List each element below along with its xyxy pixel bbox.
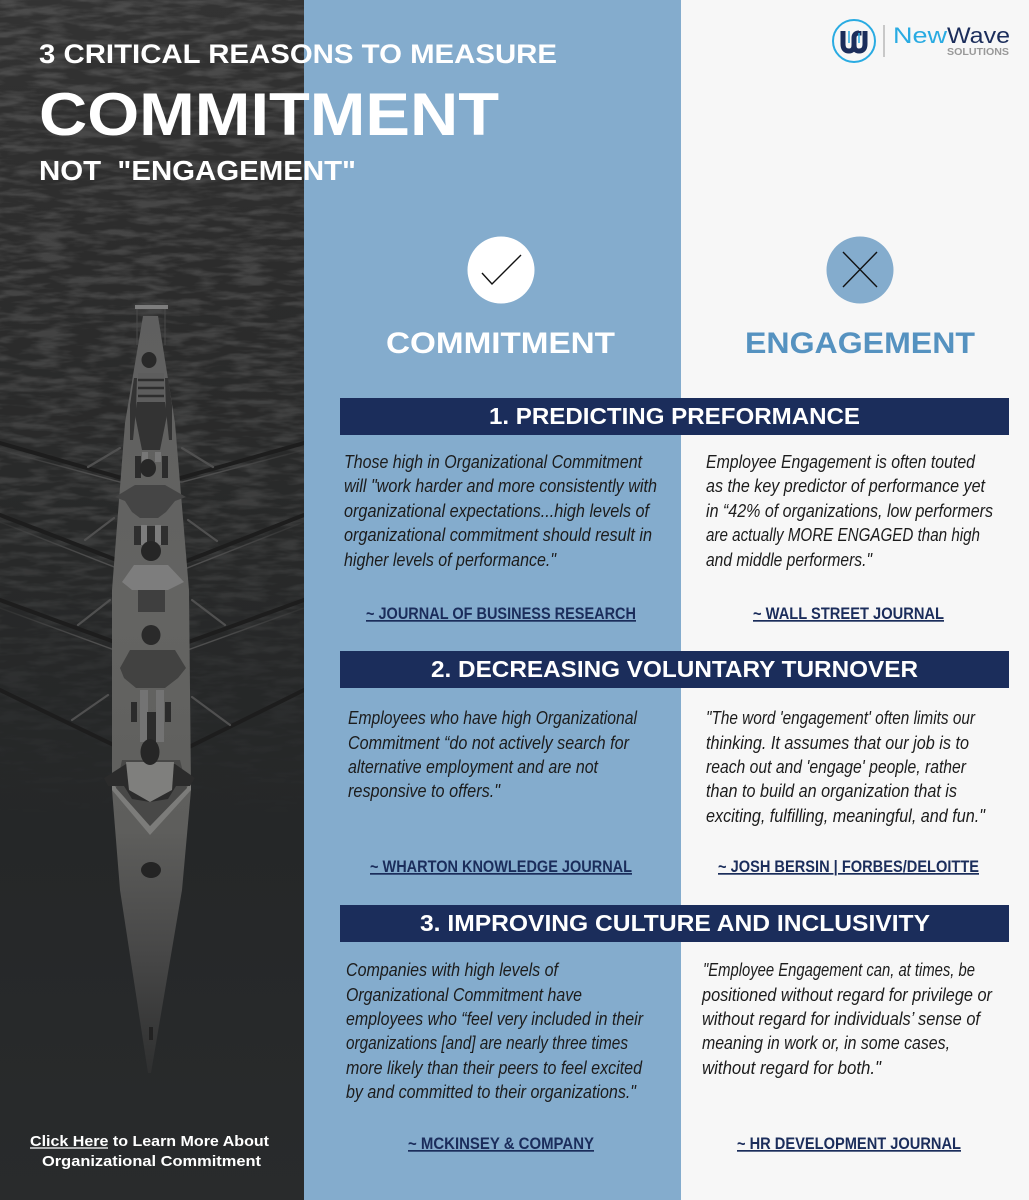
section 2 commitment quote: Commitment “do not actively search for: [348, 733, 630, 753]
section 3 banner: 3. IMPROVING CULTURE AND INCLUSIVITY: [420, 910, 930, 936]
section 3 engagement quote: [701, 960, 993, 1078]
boat hull: [112, 316, 191, 1073]
heading: engagement: ENGAGEMENT: [745, 327, 975, 360]
section 1 commitment quote: Those high in Organizational Commitment: [344, 452, 643, 472]
section 1 commitment quote: will "work harder and more consistently with: [344, 476, 657, 496]
rower 1: [130, 352, 172, 450]
section 1 engagement quote: are actually MORE ENGAGED than high: [706, 525, 980, 545]
section 1 engagement quote: [706, 452, 993, 570]
section 2 commitment quote: alternative employment and are not: [348, 757, 599, 777]
source: wharton knowledge journal: ~ WHARTON KNOWLEDGE JOURNAL: [370, 857, 632, 876]
section 3 engagement quote: meaning in work or, in some cases,: [702, 1033, 950, 1053]
section 1 commitment quote: organizational commitment should result in: [344, 525, 652, 545]
logo: NewWave Solutions: Wave: [947, 23, 1010, 48]
source: wall street journal: ~ WALL STREET JOURNAL: [753, 604, 944, 623]
section 2 commitment quote: [348, 708, 638, 801]
section 1 commitment quote: higher levels of performance.": [344, 550, 557, 570]
call to action: [30, 1133, 269, 1170]
section 1 engagement quote: and middle performers.": [706, 550, 873, 570]
section 1 engagement quote: in “42% of organizations, low performers: [706, 501, 993, 521]
logo: NewWave Solutions: [833, 20, 1010, 62]
call to action: Click Here to Learn More About: [30, 1133, 269, 1150]
section 2 commitment quote: responsive to offers.": [348, 781, 501, 801]
section 1 banner: 1. PREDICTING PREFORMANCE: [489, 403, 860, 429]
section 2 engagement quote: exciting, fulfilling, meaningful, and fun.": [706, 806, 986, 826]
section 3 engagement quote: "Employee Engagement can, at times, be: [703, 960, 975, 980]
section 2 engagement quote: [706, 708, 986, 826]
section 3 engagement quote: positioned without regard for privilege or: [701, 985, 993, 1005]
section 1 engagement quote: Employee Engagement is often touted: [706, 452, 976, 472]
rower 3: [122, 541, 184, 612]
title: 3 CRITICAL REASONS TO MEASURE: [39, 39, 557, 69]
section 2 banner: 2. DECREASING VOLUNTARY TURNOVER: [431, 656, 918, 682]
heading: commitment: COMMITMENT: [386, 327, 615, 360]
section 1 commitment quote: [344, 452, 657, 570]
photo: rowing boat on dark water: [0, 0, 304, 1200]
section 3 commitment quote: [346, 960, 644, 1102]
panel: commitment column: [304, 0, 681, 1200]
title: NOT "ENGAGEMENT": [39, 155, 356, 186]
section 3 commitment quote: by and committed to their organizations.": [346, 1082, 637, 1102]
section 2 engagement quote: reach out and 'engage' people, rather: [706, 757, 967, 777]
section 2 engagement quote: than to build an organization that is: [706, 781, 957, 801]
section 3 commitment quote: Companies with high levels of: [346, 960, 560, 980]
source: mckinsey and company: ~ MCKINSEY & COMPANY: [408, 1134, 595, 1153]
source: josh bersin forbes deloitte: ~ JOSH BERSIN | FORBES/DELOITTE: [718, 857, 979, 876]
section 3 banner: [340, 905, 1009, 942]
icon: check mark: [468, 236, 534, 304]
section 2 engagement quote: "The word 'engagement' often limits our: [706, 708, 976, 728]
section 2 engagement quote: thinking. It assumes that our job is to: [706, 733, 969, 753]
section 3 commitment quote: employees who “feel very included in their: [346, 1009, 644, 1029]
section 2 banner: [340, 651, 1009, 688]
section 3 engagement quote: without regard for individuals’ sense of: [702, 1009, 982, 1029]
section 1 banner: [340, 398, 1009, 435]
title: [39, 39, 557, 186]
section 1 commitment quote: organizational expectations...high levels of: [344, 501, 651, 521]
source: hr development journal: ~ HR DEVELOPMENT JOURNAL: [737, 1134, 961, 1153]
section 2 commitment quote: Employees who have high Organizational: [348, 708, 638, 728]
section 1 engagement quote: as the key predictor of performance yet: [706, 476, 986, 496]
call to action: Organizational Commitment: [42, 1153, 261, 1170]
title: COMMITMENT: [39, 81, 499, 148]
rower 4: [120, 625, 186, 744]
logo: NewWave Solutions: New: [893, 23, 947, 48]
boat bow bar: [135, 305, 168, 309]
logo: NewWave Solutions: SOLUTIONS: [947, 47, 1009, 58]
section 3 engagement quote: without regard for both.": [702, 1058, 883, 1078]
rower 2: [115, 452, 186, 545]
section 3 commitment quote: more likely than their peers to feel excited: [346, 1058, 643, 1078]
icon: cross: [826, 236, 894, 304]
section 3 commitment quote: Organizational Commitment have: [346, 985, 582, 1005]
rower 5: [112, 740, 191, 802]
source: journal of business research: ~ JOURNAL OF BUSINESS RESEARCH: [366, 604, 636, 623]
section 3 commitment quote: organizations [and] are nearly three times: [346, 1033, 628, 1053]
